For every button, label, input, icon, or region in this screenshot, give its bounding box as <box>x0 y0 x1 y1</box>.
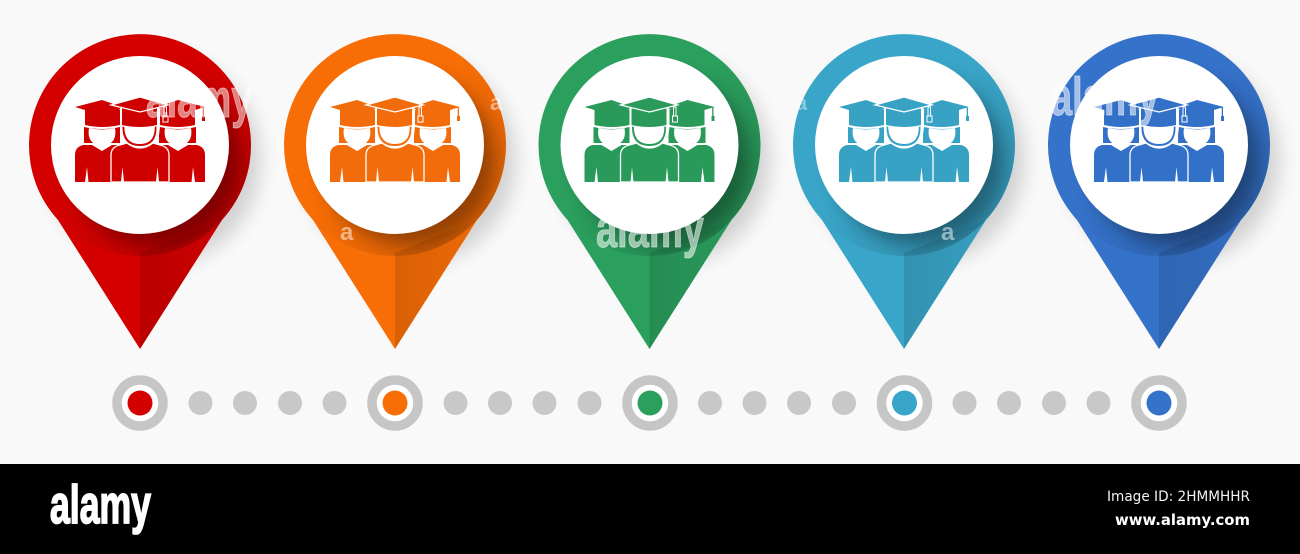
watermark: red pin: alamy <box>146 69 252 129</box>
watermark: orange pin upper letter: a <box>490 90 503 115</box>
timeline <box>117 380 1182 426</box>
map pin: green <box>538 34 770 349</box>
map pin: teal blue <box>793 34 1024 349</box>
footer bar <box>0 464 1300 554</box>
map pin: blue <box>1048 34 1279 349</box>
watermark: teal pin upper letter: a <box>795 90 808 115</box>
timeline marker: green <box>627 380 673 426</box>
timeline marker: blue <box>1136 380 1182 426</box>
watermarks <box>146 67 1159 259</box>
timeline marker: red <box>117 380 163 426</box>
watermark: blue pin: alamy <box>1051 67 1159 127</box>
alamy logo: alamy <box>50 475 151 535</box>
watermark: orange pin lower letter: a <box>340 219 354 246</box>
image id: Image ID: 2HMMHHR <box>1107 489 1250 505</box>
timeline grey dots <box>188 391 1110 415</box>
map pin: orange <box>284 34 515 349</box>
map pin: red <box>29 34 260 349</box>
timeline marker: orange <box>372 380 418 426</box>
watermark: green pin: alamy <box>596 199 704 259</box>
watermark: teal pin lower letter: a <box>941 219 955 246</box>
timeline marker: teal blue <box>882 380 928 426</box>
website: www.alamy.com <box>1115 511 1250 529</box>
